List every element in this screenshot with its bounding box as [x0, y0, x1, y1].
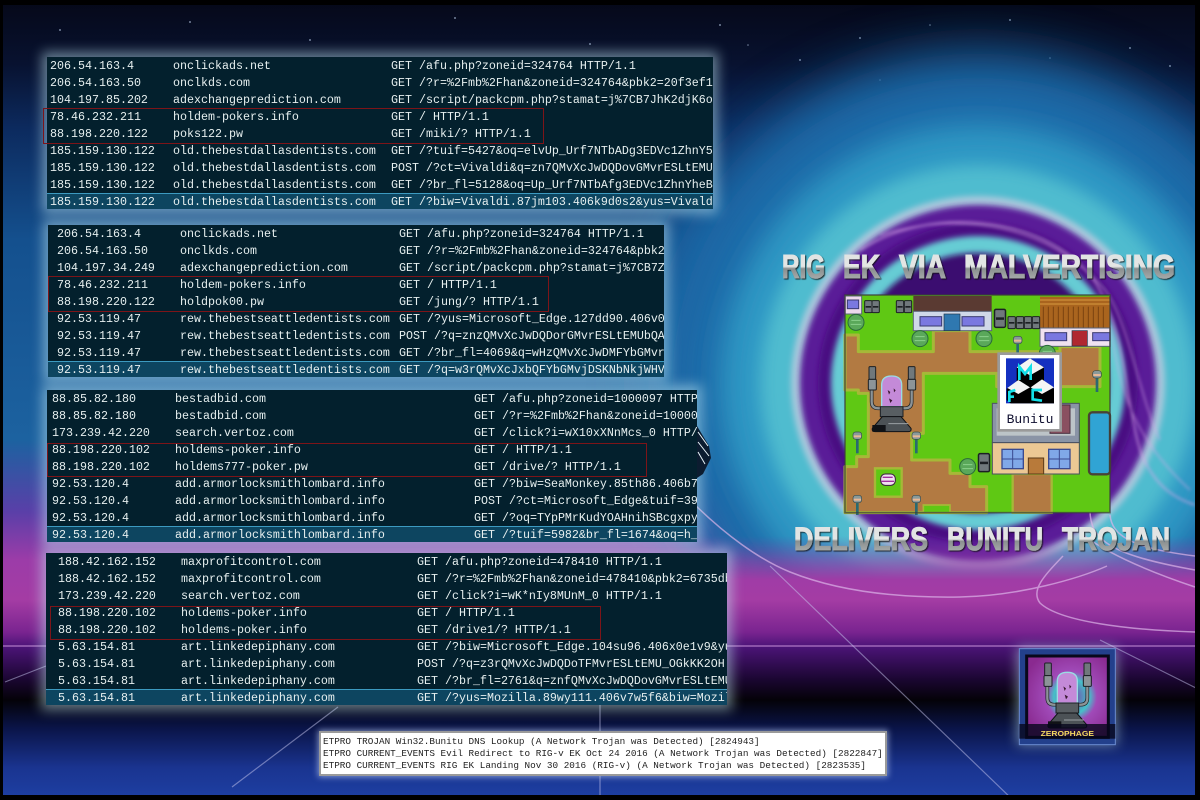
panel: traffic log 1: 206.54.163.50	[50, 76, 141, 90]
panel: traffic log 4: maxprofitcontrol.com	[181, 555, 321, 569]
panel: traffic log 4: 88.198.220.102	[58, 606, 156, 620]
callout: IDS alert list: ETPRO CURRENT_EVENTS Evil Redirect to RIG-v EK Oct 24 2016 (A Network Trojan was Detected) [2822847]	[323, 748, 883, 759]
panel: traffic log 3: GET /click?i=wX10xXNnMcs_0 HTTP/	[474, 426, 697, 440]
subtitle: delivers Bunitu trojan	[794, 521, 1170, 557]
panel: traffic log 4: holdems-poker.info	[181, 606, 307, 620]
highlight box: log 1 suspicious rows	[43, 108, 544, 144]
panel: traffic log 4: art.linkedepiphany.com	[181, 657, 335, 671]
panel: traffic log 2: adexchangeprediction.com	[180, 261, 348, 275]
panel: traffic log 1: GET /miki/? HTTP/1.1	[391, 127, 531, 141]
panel: traffic log 4: 5.63.154.81	[58, 657, 135, 671]
panel: traffic log 4: GET /click?i=wK*nIy8MUnM_0 HTTP/1.1	[417, 589, 662, 603]
panel: traffic log 3: 92.53.120.4	[52, 477, 129, 491]
icon: Bunitu MFC application	[999, 354, 1061, 430]
panel: traffic log 2: GET /afu.php?zoneid=324764 HTTP/1.1	[399, 227, 644, 241]
panel: traffic log 2: GET /?br_fl=4069&q=wHzQMvXcJwDMFYbGMvr	[399, 346, 664, 360]
panel: traffic log 3: GET /?r=%2Fmb%2Fhan&zoneid=10000	[474, 409, 697, 423]
panel: traffic log 4	[46, 553, 727, 705]
panel: traffic log 1: old.thebestdallasdentists.com	[173, 195, 376, 209]
logo: Zerophage badge	[1018, 648, 1116, 746]
creature	[881, 474, 895, 485]
panel: traffic log 2: GET / HTTP/1.1	[399, 278, 497, 292]
panel: traffic log 1: 185.159.130.122	[50, 161, 155, 175]
panel: traffic log 2: 206.54.163.4	[57, 227, 141, 241]
panel: traffic log 1: GET /afu.php?zoneid=324764 HTTP/1.1	[391, 59, 636, 73]
panel: traffic log 3: add.armorlocksmithlombard.info	[175, 528, 385, 542]
panel: traffic log 1: GET /?r=%2Fmb%2Fhan&zoneid=324764&pbk2=20f3ef1	[391, 76, 713, 90]
right house	[1040, 297, 1110, 329]
panel: traffic log 1: onclkds.com	[173, 76, 250, 90]
panel: traffic log 2: 88.198.220.122	[57, 295, 155, 309]
panel: traffic log 4: art.linkedepiphany.com	[181, 674, 335, 688]
panel: traffic log 4: art.linkedepiphany.com	[181, 691, 335, 705]
panel: traffic log 2: onclickads.net	[180, 227, 278, 241]
panel: traffic log 1: 185.159.130.122	[50, 195, 155, 209]
panel: traffic log 1: adexchangeprediction.com	[173, 93, 341, 107]
panel: traffic log 4: holdems-poker.info	[181, 623, 307, 637]
dirt paths	[845, 331, 1100, 513]
top house	[913, 296, 992, 312]
panel: traffic log 1: 185.159.130.122	[50, 144, 155, 158]
panel: traffic log 1: holdem-pokers.info	[173, 110, 299, 124]
panel: traffic log 4: GET /?br_fl=2761&q=znfQMvXcJwDQDovGMvrESLtEMU	[417, 674, 727, 688]
panel: traffic log 1: 104.197.85.202	[50, 93, 148, 107]
pond	[1089, 412, 1110, 474]
panel: traffic log 2: rew.thebestseattledentists.com	[180, 312, 390, 326]
horizon line	[0, 645, 1200, 647]
subtitle: delivers Bunitu trojan: DELIVERS	[794, 521, 928, 557]
panel: traffic log 3: bestadbid.com	[175, 392, 266, 406]
panel: traffic log 4: GET /drive1/? HTTP/1.1	[417, 623, 571, 637]
panel: traffic log 4: POST /?q=z3rQMvXcJwDQDoTFMvrESLtEMU_OGkKK2OH	[417, 657, 725, 671]
panel: traffic log 3	[47, 390, 697, 542]
highlight box: log 3 suspicious rows	[47, 443, 647, 477]
panel: traffic log 3: 92.53.120.4	[52, 511, 129, 525]
panel: traffic log 1: 88.198.220.122	[50, 127, 148, 141]
panel: traffic log 4: GET /?biw=Microsoft_Edge.104su96.406x0e1v9&yu	[417, 640, 727, 654]
robot character	[868, 367, 916, 432]
panel: traffic log 3: GET /drive/? HTTP/1.1	[474, 460, 621, 474]
panel: traffic log 3: 88.198.220.102	[52, 460, 150, 474]
panel: traffic log 1	[47, 57, 713, 209]
panel: traffic log 2: POST /?q=znzQMvXcJwDQDorGMvrESLtEMUbQA	[399, 329, 664, 343]
pale neon curves	[690, 500, 1195, 632]
panel: traffic log 4: 5.63.154.81	[58, 674, 135, 688]
bottom house	[992, 403, 1079, 443]
panel: traffic log 4: 88.198.220.102	[58, 623, 156, 637]
panel: traffic log 4: GET /?r=%2Fmb%2Fhan&zoneid=478410&pbk2=6735db	[417, 572, 727, 586]
corner house	[845, 296, 862, 314]
perspective grid rays	[5, 566, 1200, 800]
callout: IDS alert list: ETPRO TROJAN Win32.Bunitu DNS Lookup (A Network Trojan was Detected) [2824943]	[323, 736, 760, 747]
panel: traffic log 4: GET /?yus=Mozilla.89wy111.406v7w5f6&biw=Mozil	[417, 691, 727, 705]
trees and posts	[848, 314, 864, 330]
panel: traffic log 2: rew.thebestseattledentists.com	[180, 363, 390, 377]
panel: traffic log 4: 188.42.162.152	[58, 572, 156, 586]
glow behind logo	[1017, 647, 1117, 745]
panel: traffic log 1: poks122.pw	[173, 127, 243, 141]
panel: traffic log 3: 88.85.82.180	[52, 392, 136, 406]
highlight box: log 2 suspicious rows	[48, 276, 549, 312]
panel: traffic log 2: rew.thebestseattledentists.com	[180, 329, 390, 343]
panel: traffic log 4: 188.42.162.152	[58, 555, 156, 569]
title: RIG EK via malvertising	[782, 248, 1176, 285]
panel: traffic log 2: 206.54.163.50	[57, 244, 148, 258]
panel: traffic log 3: add.armorlocksmithlombard.info	[175, 494, 385, 508]
panel: traffic log 3: add.armorlocksmithlombard.info	[175, 477, 385, 491]
panel: traffic log 1: old.thebestdallasdentists.com	[173, 161, 376, 175]
panel: traffic log 1: GET /script/packcpm.php?stamat=j%7CB7JhK2djK6o	[391, 93, 713, 107]
panel: traffic log 1: 78.46.232.211	[50, 110, 141, 124]
panel: traffic log 4: GET /afu.php?zoneid=478410 HTTP/1.1	[417, 555, 662, 569]
callout: IDS alert list	[321, 733, 885, 774]
panel: traffic log 4: search.vertoz.com	[181, 589, 300, 603]
panel: traffic log 3: 88.85.82.180	[52, 409, 136, 423]
logo wordmark: ZEROPHAGE	[1041, 731, 1094, 738]
glow behind log tables	[42, 52, 718, 214]
callout: IDS alert list: ETPRO CURRENT_EVENTS RIG EK Landing Nov 30 2016 (RIG-v) (A Network Trojan was Detected) [2823535]	[323, 760, 866, 771]
panel: traffic log 2: GET /?r=%2Fmb%2Fhan&zoneid=324764&pbk2	[399, 244, 664, 258]
panel: traffic log 3: search.vertoz.com	[175, 426, 294, 440]
highlight box: log 4 suspicious rows	[50, 606, 601, 640]
panel: traffic log 1: 185.159.130.122	[50, 178, 155, 192]
panel: traffic log 3: GET /?biw=SeaMonkey.85th86.406b7	[474, 477, 697, 491]
panel: traffic log 3: holdems-poker.info	[175, 443, 301, 457]
panel: traffic log 3: 92.53.120.4	[52, 528, 129, 542]
panel: traffic log 1: old.thebestdallasdentists.com	[173, 144, 376, 158]
panel: traffic log 2: 92.53.119.47	[57, 346, 141, 360]
panel: traffic log 3: GET /?oq=TYpPMrKudYOAHnihSBcgxpy	[474, 511, 697, 525]
icon: Bunitu MFC application: Bunitu	[1007, 412, 1053, 427]
panel: traffic log 4: art.linkedepiphany.com	[181, 640, 335, 654]
panel: traffic log 2: rew.thebestseattledentists.com	[180, 346, 390, 360]
panel: traffic log 4: GET / HTTP/1.1	[417, 606, 515, 620]
panel: traffic log 2	[48, 225, 664, 377]
panel: traffic log 2: GET /?q=w3rQMvXcJxbQFYbGMvjDSKNbNkjWHV	[399, 363, 664, 377]
panel: traffic log 1: old.thebestdallasdentists.com	[173, 178, 376, 192]
panel: traffic log 2: GET /jung/? HTTP/1.1	[399, 295, 539, 309]
panel: traffic log 1: POST /?ct=Vivaldi&q=zn7QMvXcJwDQDovGMvrESLtEMU	[391, 161, 713, 175]
subtitle: delivers Bunitu trojan: BUNITU	[947, 521, 1043, 557]
title: RIG EK via malvertising: RIG	[782, 248, 825, 285]
swirl fragment beside log 3	[697, 426, 711, 478]
panel: traffic log 1: GET / HTTP/1.1	[391, 110, 489, 124]
panel: traffic log 1: onclickads.net	[173, 59, 271, 73]
panel: traffic log 4: maxprofitcontrol.com	[181, 572, 321, 586]
panel: traffic log 2: GET /script/packcpm.php?stamat=j%7CB7Z	[399, 261, 664, 275]
panel: traffic log 3: add.armorlocksmithlombard.info	[175, 511, 385, 525]
screenshot: game map scene with Bunitu icon	[844, 294, 1112, 515]
panel: traffic log 2: onclkds.com	[180, 244, 257, 258]
panel: traffic log 4: 173.239.42.220	[58, 589, 156, 603]
panel: traffic log 2: 92.53.119.47	[57, 312, 141, 326]
panel: traffic log 3: 88.198.220.102	[52, 443, 150, 457]
panel: traffic log 3: 173.239.42.220	[52, 426, 150, 440]
title: RIG EK via malvertising: EK	[843, 248, 880, 285]
panel: traffic log 3: GET /afu.php?zoneid=1000097 HTTP	[474, 392, 697, 406]
panel: traffic log 1: GET /?br_fl=5128&oq=Up_Urf7NTbAfg3EDVc1ZhnYheB	[391, 178, 713, 192]
panel: traffic log 3: bestadbid.com	[175, 409, 266, 423]
panel: traffic log 2: 78.46.232.211	[57, 278, 148, 292]
panel: traffic log 3: GET / HTTP/1.1	[474, 443, 572, 457]
panel: traffic log 2: 92.53.119.47	[57, 363, 141, 377]
panel: traffic log 2: 92.53.119.47	[57, 329, 141, 343]
panel: traffic log 2: 104.197.34.249	[57, 261, 155, 275]
panel: traffic log 1: 206.54.163.4	[50, 59, 134, 73]
title: RIG EK via malvertising: VIA	[899, 248, 946, 285]
panel: traffic log 3: POST /?ct=Microsoft_Edge&tuif=39	[474, 494, 697, 508]
panel: traffic log 3: GET /?tuif=5982&br_fl=1674&oq=h_	[474, 528, 697, 542]
panel: traffic log 2: holdem-pokers.info	[180, 278, 306, 292]
panel: traffic log 4: 5.63.154.81	[58, 640, 135, 654]
panel: traffic log 2: GET /?yus=Microsoft_Edge.127dd90.406v0	[399, 312, 664, 326]
panel: traffic log 3: holdems777-poker.pw	[175, 460, 308, 474]
panel: traffic log 3: 92.53.120.4	[52, 494, 129, 508]
panel: traffic log 4: 5.63.154.81	[58, 691, 135, 705]
panel: traffic log 2: holdpok00.pw	[180, 295, 264, 309]
panel: traffic log 1: GET /?tuif=5427&oq=elvUp_Urf7NTbADg3EDVc1ZhnY5	[391, 144, 713, 158]
panel: traffic log 1: GET /?biw=Vivaldi.87jm103.406k9d0s2&yus=Vivald	[391, 195, 713, 209]
